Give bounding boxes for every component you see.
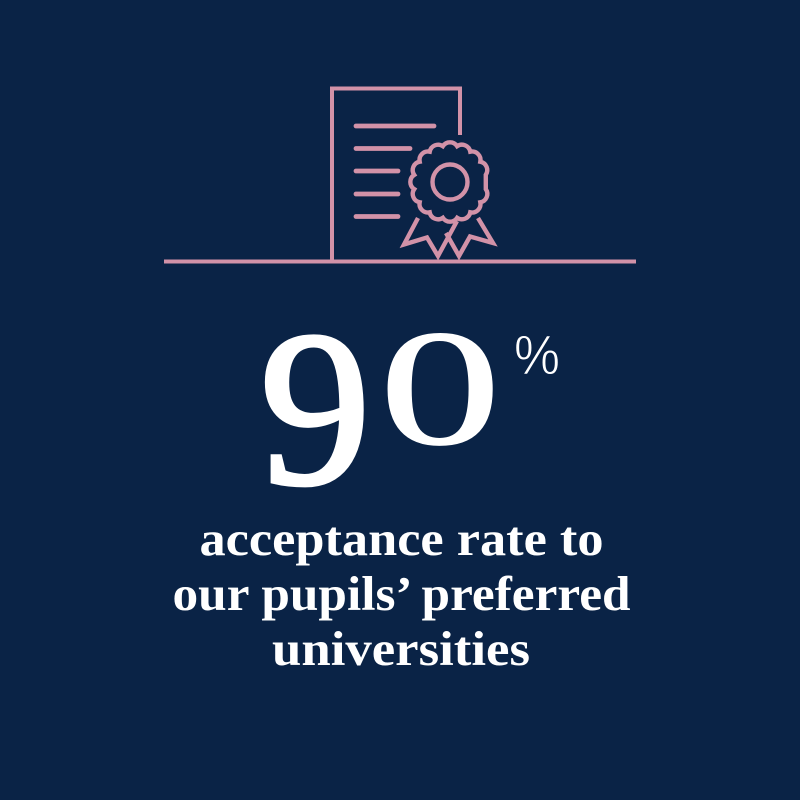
document outline xyxy=(332,88,460,262)
rosette centre ring xyxy=(432,164,468,200)
big number: 90 percent xyxy=(260,286,560,531)
digit 0: 0 xyxy=(380,296,501,479)
ground line xyxy=(164,260,636,264)
percent sign: % xyxy=(514,323,560,386)
caption xyxy=(172,511,630,676)
rosette seal xyxy=(404,136,496,228)
caption: our pupils’ preferred xyxy=(172,566,630,621)
icon: certificate with rosette xyxy=(164,88,636,262)
ribbon tails xyxy=(404,218,493,256)
document text lines xyxy=(356,126,434,216)
caption: acceptance rate to xyxy=(200,511,604,566)
caption: universities xyxy=(272,621,530,676)
digit 9: 9 xyxy=(260,286,370,531)
